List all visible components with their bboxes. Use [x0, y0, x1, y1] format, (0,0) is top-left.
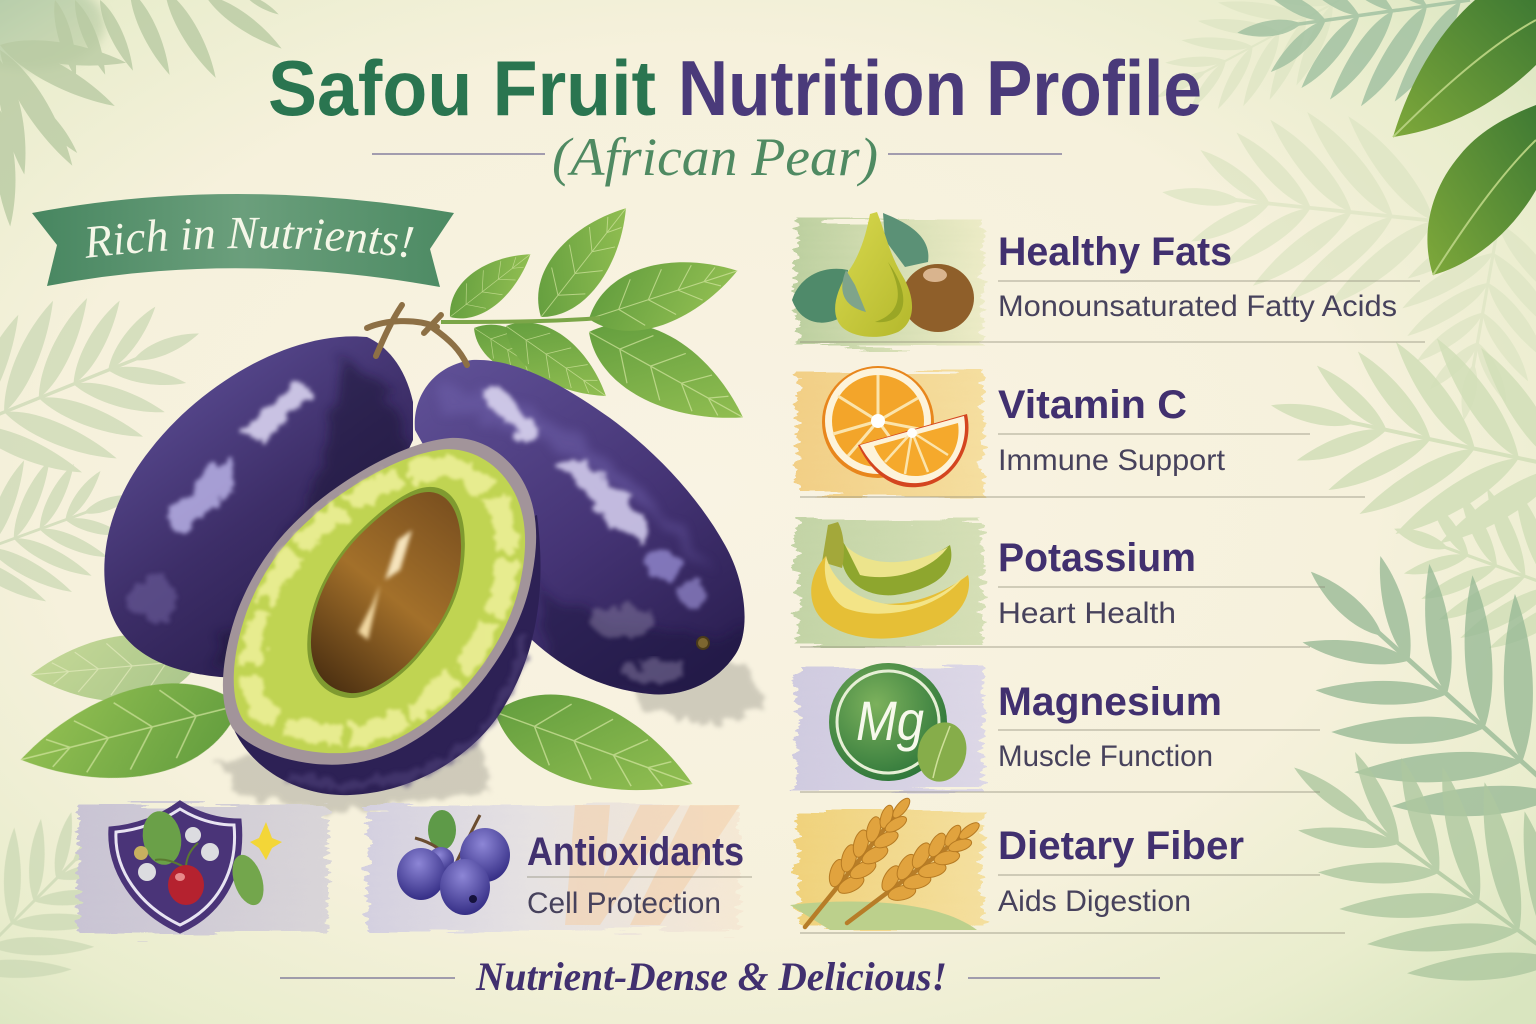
icon: wheat — [789, 785, 991, 940]
background foliage: right side — [1127, 0, 1536, 1024]
banner: Rich in Nutrients!: Rich in Nutrients! — [86, 218, 414, 258]
heading: Magnesium — [998, 680, 1222, 724]
row: Magnesium — [797, 663, 1320, 792]
swatch: healthy fats — [797, 220, 983, 346]
leaf sprig — [437, 191, 760, 445]
banner: Rich in Nutrients! — [32, 194, 494, 318]
heading: Antioxidants — [527, 830, 744, 874]
icon: bananas — [811, 522, 969, 639]
icon: blueberries — [397, 810, 510, 915]
swatch — [367, 805, 739, 931]
footer tagline: Nutrient-Dense & Delicious! — [475, 954, 947, 999]
title: Safou Fruit — [268, 44, 656, 132]
description: Heart Health — [998, 597, 1176, 630]
seed — [307, 487, 465, 698]
icon: oil drop and nut — [792, 212, 974, 337]
left fruit — [104, 336, 413, 690]
heading: Potassium — [998, 536, 1196, 580]
subtitle: (African Pear) — [552, 127, 878, 187]
background foliage: left side and corners — [0, 0, 286, 1024]
heading: Dietary Fiber — [998, 824, 1244, 868]
title — [268, 44, 1202, 132]
icon: large leaves top right — [1393, 0, 1536, 275]
swatch: dietary fiber — [797, 810, 983, 928]
shadows — [215, 660, 768, 812]
title: Nutrition Profile — [678, 44, 1202, 132]
description: Aids Digestion — [998, 885, 1191, 918]
row: Dietary Fiber — [789, 785, 1345, 940]
swatch: vitamin c — [797, 372, 983, 495]
icon: shield — [110, 802, 282, 932]
base leaves — [11, 629, 707, 820]
description: Muscle Function — [998, 740, 1213, 773]
stems — [367, 305, 467, 365]
icon: Mg badge — [829, 663, 973, 787]
description: Cell Protection — [527, 887, 721, 920]
heading: Vitamin C — [998, 383, 1187, 427]
description: Immune Support — [998, 444, 1226, 477]
halved fruit — [223, 438, 541, 795]
swatch: magnesium — [797, 667, 983, 791]
panel: antioxidant shield — [78, 802, 328, 933]
decorative stripes — [565, 805, 740, 925]
swatch: potassium — [797, 520, 983, 646]
right fruit — [415, 360, 745, 700]
panel: Antioxidants — [367, 805, 752, 931]
row: Healthy Fats — [792, 212, 1425, 346]
icon: Mg badge: Mg — [856, 689, 924, 752]
description: Monounsaturated Fatty Acids — [998, 290, 1397, 323]
row: Vitamin C — [797, 366, 1365, 497]
row: Potassium — [797, 520, 1325, 647]
heading: Healthy Fats — [998, 230, 1232, 274]
icon: orange slices — [822, 366, 969, 487]
illustration: safou fruit — [11, 191, 768, 820]
